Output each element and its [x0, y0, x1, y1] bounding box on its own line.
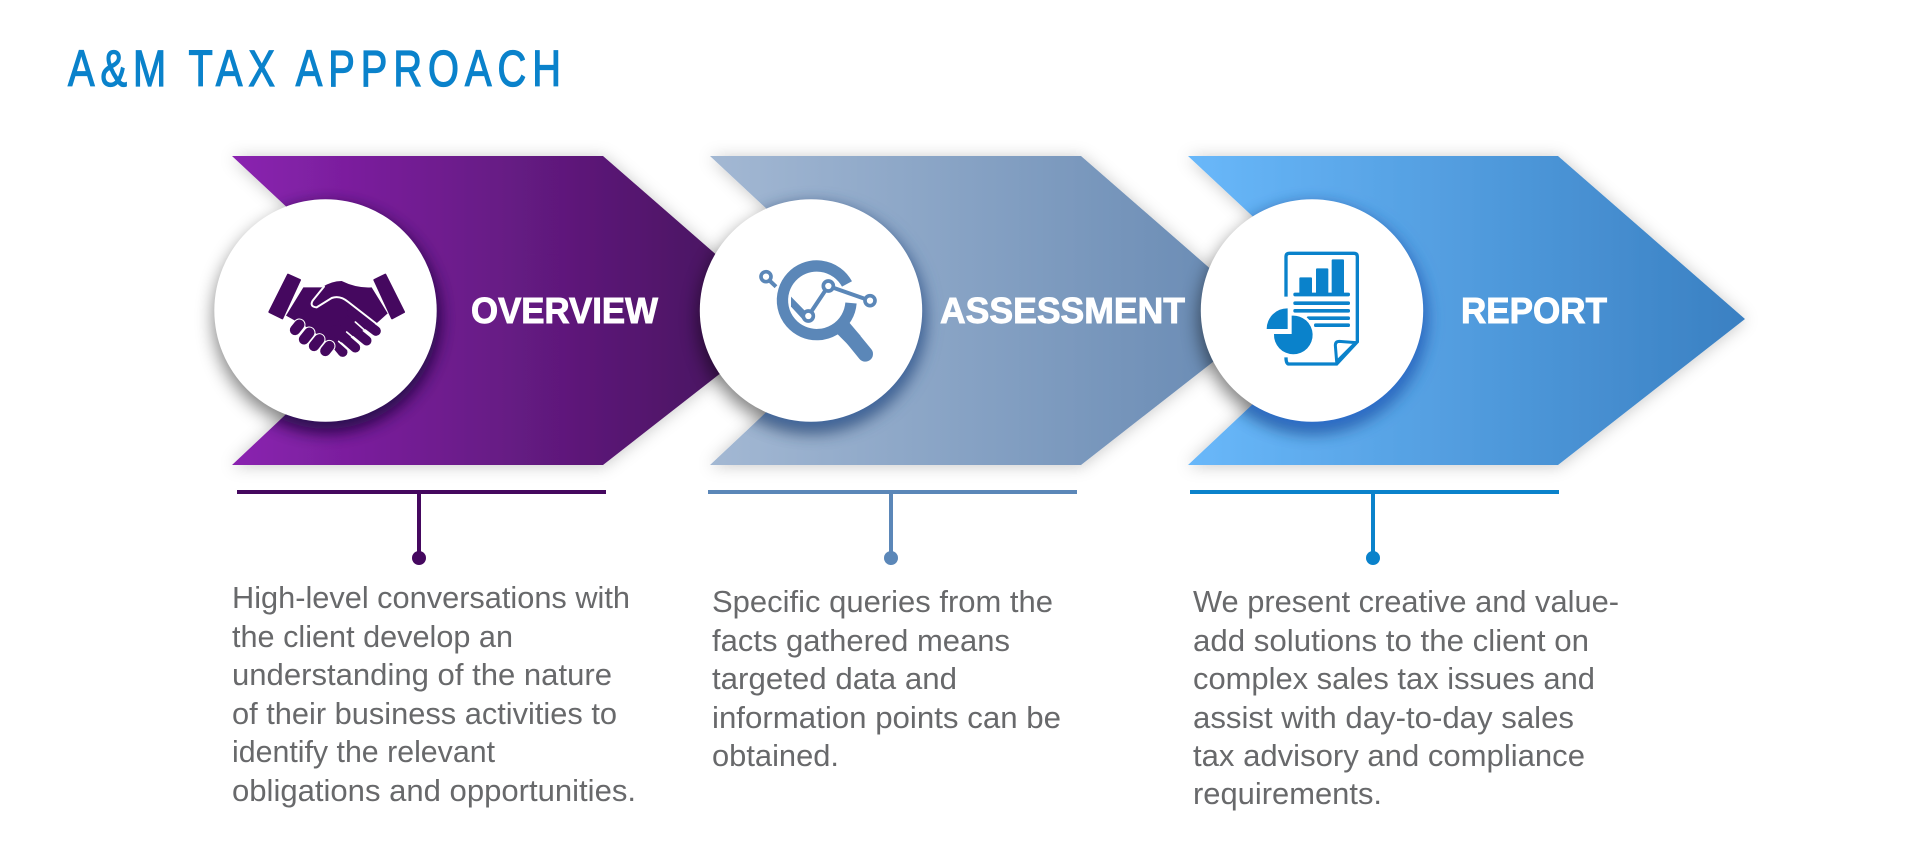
connector: overview — [237, 490, 606, 565]
circle: assessment — [698, 199, 924, 430]
circle: report — [1199, 199, 1425, 430]
text block: report: We present creative and value- — [1193, 584, 1619, 619]
label: overview: OVERVIEW — [471, 290, 658, 331]
arrow: report chevron — [1188, 156, 1745, 465]
text block: report: assist with day-to-day sales — [1193, 700, 1574, 735]
text block: report: tax advisory and compliance — [1193, 738, 1585, 773]
text block: assessment: targeted data and — [712, 661, 957, 696]
icon: handshake — [269, 275, 404, 352]
text block: report — [1193, 584, 1619, 811]
text block: report: add solutions to the client on — [1193, 623, 1589, 658]
text block: assessment: information points can be — [712, 700, 1061, 735]
circle: overview — [214, 199, 438, 430]
icon: magnifier with chart — [761, 266, 875, 354]
icon: report document — [1267, 253, 1357, 364]
connector: report — [1190, 490, 1559, 565]
text block: overview: obligations and opportunities. — [232, 773, 636, 808]
text block: overview: High-level conversations with — [232, 580, 630, 615]
title: A&M TAX APPROACH — [68, 40, 561, 97]
text block: overview: the client develop an — [232, 619, 513, 654]
connector: assessment — [708, 490, 1077, 565]
text block: report: complex sales tax issues and — [1193, 661, 1595, 696]
arrow: overview chevron — [232, 156, 790, 465]
text block: overview: understanding of the nature — [232, 657, 612, 692]
arrow: assessment chevron — [710, 156, 1268, 465]
text block: overview: of their business activities to — [232, 696, 617, 731]
text block: assessment: obtained. — [712, 738, 839, 773]
text block: assessment — [712, 584, 1061, 773]
text block: report: requirements. — [1193, 776, 1382, 811]
text block: overview — [232, 580, 636, 808]
label: assessment: ASSESSMENT — [940, 290, 1185, 331]
text block: overview: identify the relevant — [232, 734, 495, 769]
label: report: REPORT — [1461, 290, 1607, 331]
text block: assessment: Specific queries from the — [712, 584, 1053, 619]
text block: assessment: facts gathered means — [712, 623, 1010, 658]
